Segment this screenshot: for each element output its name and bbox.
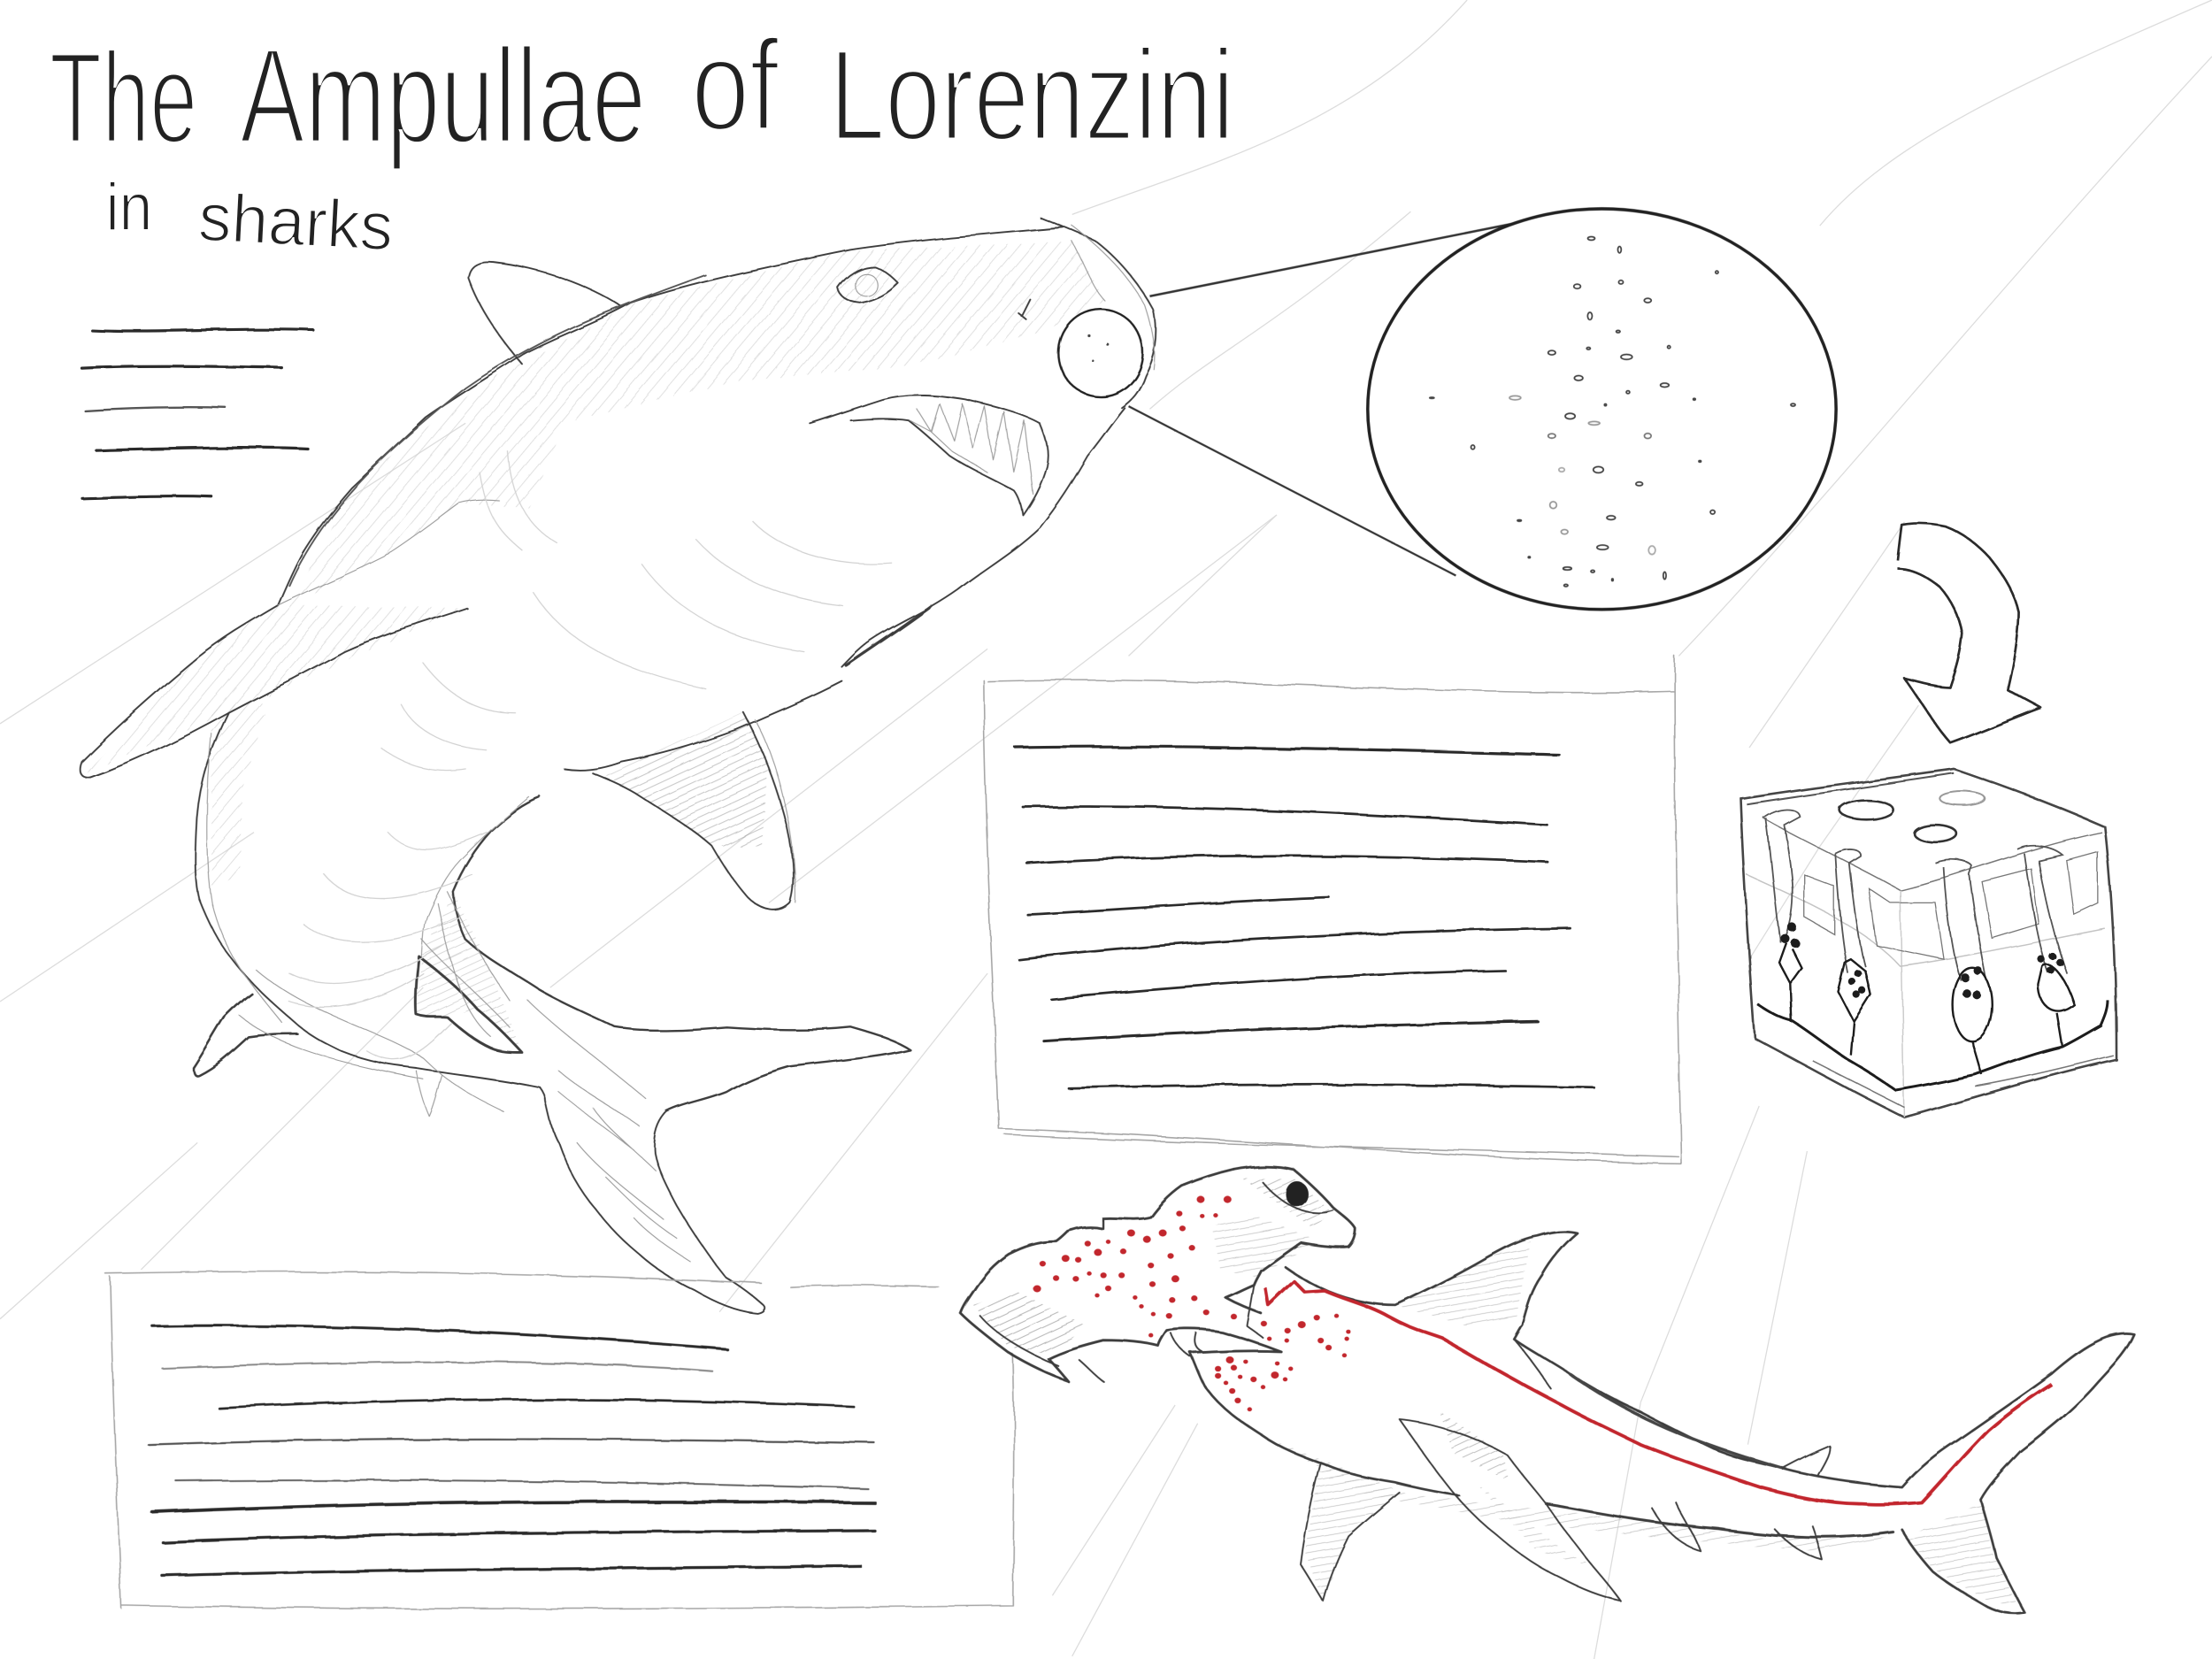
dorsal back xyxy=(1285,1232,2134,1613)
pectoral fin left xyxy=(90,608,467,778)
pectoral fin right xyxy=(593,712,794,910)
pores on top xyxy=(1839,791,1985,842)
belly xyxy=(1191,1353,1459,1495)
red electroreceptor dots xyxy=(1033,1196,1351,1411)
tail hatching xyxy=(527,1000,690,1261)
ampulla bulbs and nerve xyxy=(1758,942,2108,1090)
title: Lorenzini xyxy=(830,23,1234,168)
eye xyxy=(1285,1181,1308,1206)
epidermis band xyxy=(1747,875,2105,966)
cube bottom edge xyxy=(1813,1056,2113,1108)
mouth xyxy=(810,395,1048,515)
subtitle xyxy=(106,170,395,265)
hammerhead shading xyxy=(973,1178,2017,1605)
body left xyxy=(196,712,541,1087)
subtitle: in xyxy=(106,170,152,245)
text lines xyxy=(148,1325,875,1576)
canals xyxy=(1763,810,2067,980)
magnify source circle xyxy=(1058,309,1142,396)
nostril xyxy=(1018,299,1030,319)
box outline xyxy=(983,656,1682,1164)
cube top front edges xyxy=(1763,818,2102,890)
title: Ampullae xyxy=(240,20,646,172)
lateral line in red xyxy=(1265,1281,2051,1504)
text box: centre xyxy=(983,656,1682,1164)
second dorsal and small fins xyxy=(1783,1446,1830,1476)
anal fins xyxy=(193,993,297,1075)
title: of xyxy=(691,13,779,158)
subtitle: sharks xyxy=(196,180,395,265)
belly edge xyxy=(842,408,1125,667)
text box: bottom left xyxy=(106,1272,1014,1609)
left lower fin xyxy=(1301,1464,1400,1601)
shark back and head xyxy=(81,227,1064,778)
curved arrow xyxy=(1897,523,2041,743)
hammer head outline xyxy=(1226,1166,1356,1313)
central pectoral fin xyxy=(1400,1419,1621,1601)
dorsal fin xyxy=(468,262,621,364)
text block placeholder: top left xyxy=(81,329,313,498)
eye xyxy=(838,266,899,303)
skin cross-section cube xyxy=(1740,769,2116,1118)
cube outline xyxy=(1740,769,2116,1118)
magnified skin circle with pores xyxy=(1368,209,1836,610)
pores xyxy=(1430,237,1795,587)
hammerhead shark illustration xyxy=(961,1166,2134,1613)
snout arcs xyxy=(1040,218,1156,408)
text lines xyxy=(1016,747,1594,1087)
pelvic fin xyxy=(416,956,522,1052)
box outline xyxy=(106,1272,1014,1609)
shark shading xyxy=(85,242,1104,1052)
title xyxy=(50,13,1234,172)
tail xyxy=(541,1087,764,1313)
gill and belly arcs xyxy=(402,451,892,750)
zoom connector lines xyxy=(1129,223,1517,576)
great white shark illustration xyxy=(81,218,1156,1313)
title: The xyxy=(50,26,197,171)
